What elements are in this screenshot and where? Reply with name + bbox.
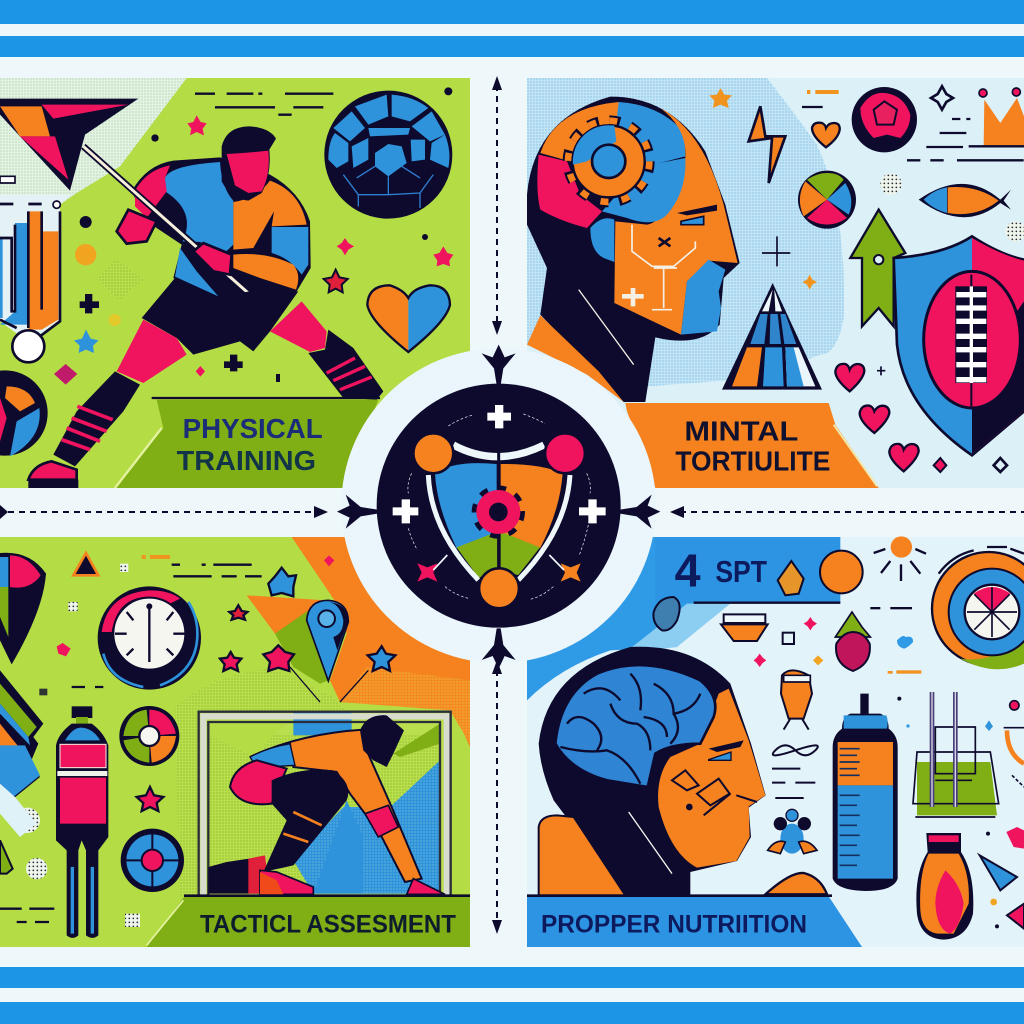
- icon: soccer ball: [324, 91, 452, 219]
- icon: clock: [98, 586, 201, 690]
- icon: figure: [768, 809, 817, 854]
- icon: bowl: [721, 614, 768, 641]
- shoulder: [539, 815, 625, 895]
- heading: 4 SPT: SPT: [715, 555, 767, 589]
- confetti: [15, 555, 334, 927]
- label: physical training: [115, 398, 380, 488]
- stars and confetti: [54, 87, 453, 385]
- panel: tactical assessment: [0, 537, 470, 947]
- dashes: [802, 107, 1024, 160]
- speckles: [880, 173, 1024, 241]
- icon: kite and pin: [247, 595, 348, 684]
- icon: pink splat: [1006, 827, 1024, 849]
- icon: square: [783, 633, 794, 644]
- center emblem: [337, 345, 660, 669]
- panel: mental fortitude: [527, 78, 1024, 488]
- icon: small ball: [0, 370, 48, 456]
- center arrows: [337, 345, 660, 669]
- icon: shield with football: [894, 236, 1024, 455]
- icon: tent pyramid: [722, 283, 822, 390]
- arrowheads: [0, 76, 684, 934]
- bottom banner: [0, 967, 1024, 1024]
- dashes: [0, 565, 368, 922]
- icon: corner arrow: [1007, 904, 1024, 929]
- label: tactical assessment: TACTICL ASSESMENT: [200, 910, 456, 938]
- center nodes: [413, 433, 585, 608]
- icon: pink ball: [852, 87, 917, 152]
- head with brain: [539, 647, 766, 895]
- icon: up arrow: [850, 210, 905, 326]
- icon: sports field: [913, 692, 999, 817]
- panel: proper nutrition: [527, 536, 1024, 947]
- icon: pie circle: [798, 171, 856, 229]
- heading: 4 SPT: [675, 544, 767, 596]
- dashes: [195, 94, 333, 115]
- label: mental fortitude: MINTAL: [684, 416, 798, 447]
- icon: gear: [568, 121, 649, 202]
- icon: sports bottle: [833, 694, 898, 891]
- confetti: [754, 607, 999, 928]
- label: tactical assessment: [147, 896, 470, 947]
- icon: orange arc: [985, 701, 1024, 787]
- icon: fish: [919, 184, 1011, 217]
- goal frame with goalkeeper: [197, 710, 452, 897]
- hands: [117, 210, 232, 275]
- icon: infinity and lines: [772, 745, 818, 798]
- icon: warning triangle: [73, 553, 98, 575]
- icon: heart: [367, 285, 450, 352]
- icon: pennant flag: [0, 99, 138, 191]
- head: [222, 126, 276, 201]
- icon: half orange: [765, 873, 827, 894]
- label: physical training: TRAINING: [177, 445, 316, 476]
- center gear: [476, 489, 521, 535]
- torso: [132, 157, 311, 298]
- icon: lightning: [749, 106, 785, 183]
- icon: sparkle: [931, 86, 953, 110]
- label: mental fortitude: [625, 403, 879, 488]
- icon: mini brain: [653, 597, 680, 631]
- icon: water bottle: [56, 706, 108, 938]
- hockey stick: [83, 146, 250, 295]
- label: proper nutrition: [527, 896, 862, 947]
- label: proper nutrition: PROPPER NUTRIITION: [541, 910, 807, 938]
- icon: map pin: [0, 553, 46, 664]
- icon: rocket: [980, 855, 1017, 905]
- label: mental fortitude: TORTIULITE: [675, 446, 830, 477]
- icon: orange circle: [820, 551, 863, 593]
- center shield: [428, 445, 570, 580]
- icon: target 2: [121, 829, 184, 892]
- goalkeeper: [208, 715, 445, 894]
- face diagram: [579, 225, 695, 365]
- icon: books: [0, 670, 43, 874]
- stars: [137, 568, 395, 811]
- icon: star: [709, 88, 732, 108]
- icon: target: [119, 706, 179, 766]
- icon: condiment bottle: [916, 833, 973, 940]
- icon: sun: [874, 536, 926, 581]
- icon: test tubes: [0, 176, 72, 362]
- top banner: [0, 0, 1024, 57]
- icon: crown: [969, 88, 1024, 146]
- icon: heart small: [812, 123, 840, 147]
- icon: dragon fruit: [835, 612, 870, 671]
- icon: gem: [778, 561, 804, 595]
- label: physical training: PHYSICAL: [183, 413, 323, 444]
- shorts and legs: [28, 278, 383, 488]
- center stars and crosses: [393, 405, 606, 599]
- icon: wheel: [932, 547, 1024, 669]
- panel: physical training: [0, 78, 470, 488]
- sparkles: [762, 236, 1007, 472]
- head profile: [527, 97, 740, 402]
- hearts: [835, 364, 919, 471]
- icon: goblet: [781, 670, 812, 730]
- player: [28, 126, 383, 488]
- heading: 4 SPT: 4: [675, 544, 701, 596]
